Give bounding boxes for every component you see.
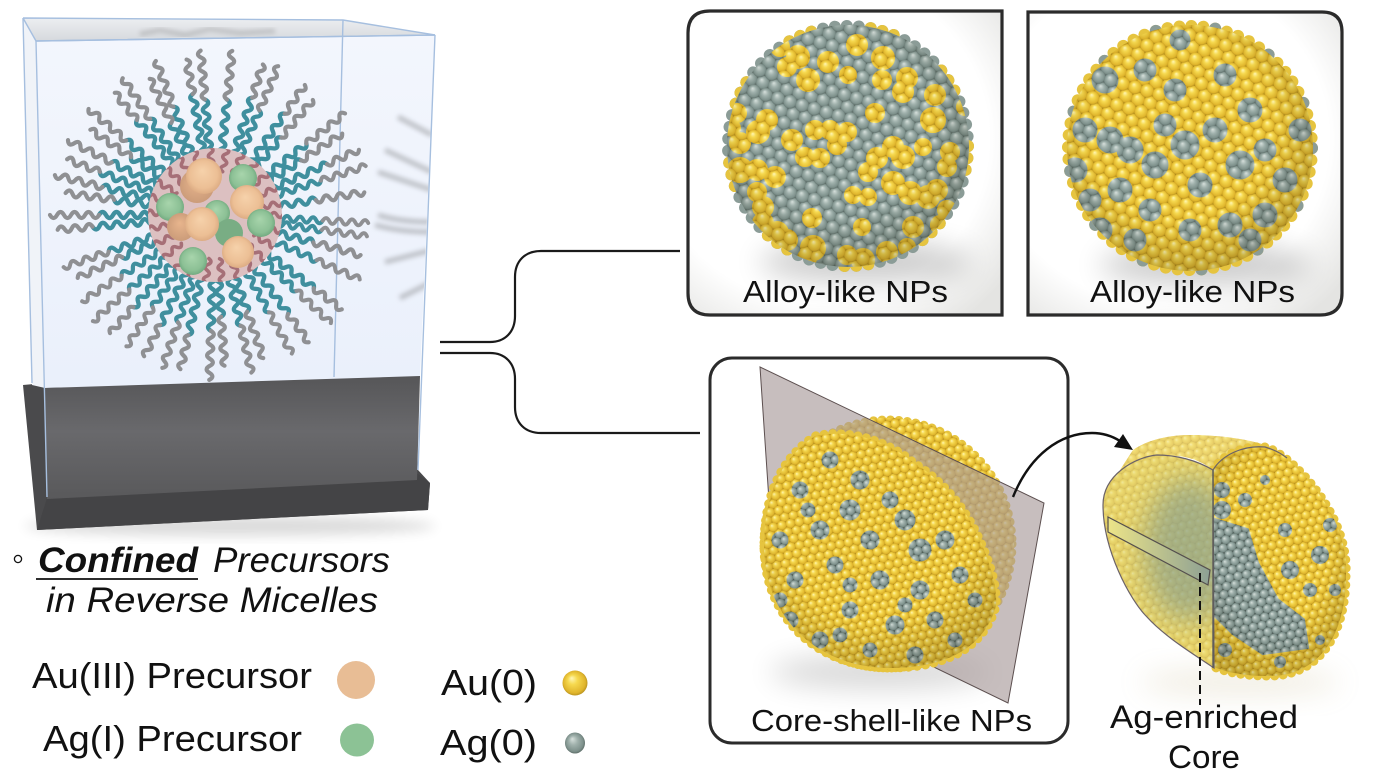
legend xyxy=(32,655,588,763)
Ag-enriched core pointer xyxy=(1199,573,1201,705)
caption: confined precursors: Precursors xyxy=(213,541,390,580)
caption: confined precursors: Confined xyxy=(38,541,199,580)
back dome xyxy=(1120,435,1268,470)
label: Ag-enriched Core: Ag-enriched xyxy=(1110,699,1298,735)
silver enriched band xyxy=(1213,520,1307,653)
dark lower panel xyxy=(45,376,420,499)
base platform shadow xyxy=(25,516,435,536)
translucent cut core xyxy=(1102,454,1215,669)
nanoparticle back half xyxy=(762,418,1014,670)
arrow to sectioned particle xyxy=(1013,433,1133,497)
label: Alloy-like NPs xyxy=(1090,274,1295,309)
front face xyxy=(36,35,435,388)
precursor spheres xyxy=(156,158,275,275)
left face xyxy=(23,18,45,388)
nanoparticle front half xyxy=(760,429,1001,672)
legend: Au(0): Au(0) xyxy=(441,662,537,703)
label: Ag-enriched Core xyxy=(1110,699,1298,773)
micelle core xyxy=(147,147,283,283)
cutting plane xyxy=(760,367,1044,703)
nanoparticle xyxy=(1063,21,1317,275)
transparent solvent box xyxy=(23,18,435,499)
panel: alloy-like NPs, gold rich xyxy=(1028,12,1342,315)
panel: core-shell-like NPs xyxy=(710,358,1068,743)
sectioned nanoparticle xyxy=(1098,435,1355,695)
surfactant chains xyxy=(50,50,368,380)
outer gold shell, cut open xyxy=(1205,440,1355,685)
label: Alloy-like NPs xyxy=(743,274,948,309)
legend: Au(III) precursor: Au(III) Precursor xyxy=(32,655,312,696)
dark base platform xyxy=(23,383,430,530)
legend: Ag(0): Ag(0) xyxy=(440,722,537,763)
caption: confined precursors: in Reverse Micelles xyxy=(46,581,378,620)
legend: Au(0) xyxy=(441,662,588,703)
panel frame xyxy=(710,358,1068,743)
panel frame xyxy=(1028,12,1342,315)
section edge xyxy=(1212,470,1214,668)
panel frame xyxy=(688,11,1002,315)
caption: confined precursors xyxy=(14,541,390,620)
core slab xyxy=(1108,517,1210,585)
top face xyxy=(23,18,435,41)
reverse micelle xyxy=(50,50,368,380)
panel: alloy-like NPs, silver rich xyxy=(688,11,1002,315)
legend: Ag(I) precursor: Ag(I) Precursor xyxy=(43,718,302,759)
legend: Ag(0) xyxy=(440,722,585,763)
connector lines xyxy=(440,251,700,433)
nanoparticle xyxy=(723,21,973,271)
label: Core-shell-like NPs xyxy=(751,703,1032,738)
